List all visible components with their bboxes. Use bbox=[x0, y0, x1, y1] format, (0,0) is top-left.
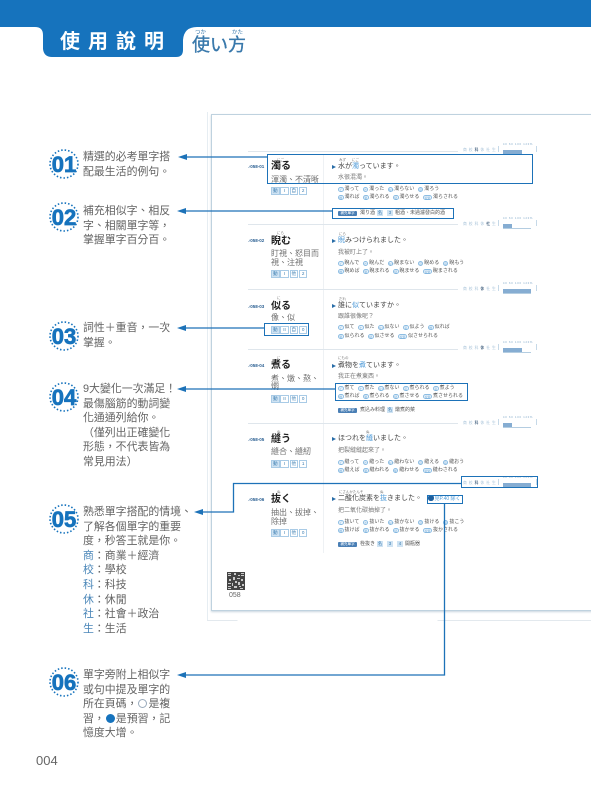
entry: 抜く: 二酸化炭素を抜きました。 bbox=[338, 495, 422, 502]
badge 06: 06 bbox=[52, 670, 76, 695]
entry: 睨む bbox=[248, 231, 464, 278]
entry: 煮る: 受 bbox=[364, 394, 367, 398]
entry: 睨む: 視、注視 bbox=[271, 258, 303, 267]
entry: 煮る: 煮れば 煮られる 煮させる 煮させられる bbox=[344, 393, 463, 399]
entry: 濁る: I bbox=[284, 188, 285, 193]
entry: 縫う: 受 bbox=[364, 468, 367, 472]
entry: 煮る: にもの bbox=[338, 356, 348, 360]
badge 03 bbox=[49, 321, 79, 351]
entry: 抜く: ♪058-06 bbox=[248, 497, 264, 502]
entry: 抜く: 除掉 bbox=[271, 517, 287, 526]
header band with tab bbox=[0, 0, 591, 57]
column divider bbox=[323, 154, 324, 553]
entry: 縫う bbox=[248, 430, 464, 473]
entry: 煮る: 0 bbox=[302, 396, 304, 401]
entry: 縫う: ぬ bbox=[277, 430, 280, 434]
entry: 睨む: 受 bbox=[364, 270, 367, 274]
badge 03: 03 bbox=[52, 324, 76, 349]
callout 01 highlight box bbox=[267, 154, 533, 184]
entry: 抜く: 把二氧化碳抽掉了。 bbox=[338, 508, 392, 514]
entry: 煮る: 使受 bbox=[425, 394, 430, 398]
entry: 似る: ない bbox=[379, 326, 385, 330]
entry: 濁る: 濁り酒 粗酒、未過濾發白的酒 bbox=[360, 210, 445, 216]
entry: 睨む: 意 bbox=[444, 262, 447, 266]
entry: 似る: 似る bbox=[271, 301, 291, 312]
entry: 抜く: 名 bbox=[378, 541, 382, 546]
entry: 抜く: I bbox=[284, 530, 285, 535]
entry: 縫う: 使 bbox=[394, 468, 397, 472]
arrow 01 bbox=[178, 154, 267, 160]
strip: row 2 frequency: 40 60 100 120% bbox=[503, 217, 533, 220]
strip: row 2 frequency bbox=[463, 217, 537, 229]
entry: 抜く: て bbox=[339, 520, 342, 524]
badge 05: 05 bbox=[52, 507, 76, 532]
panel: sample dictionary page bbox=[211, 114, 591, 611]
text 04: 最傷腦筋的動詞變 bbox=[83, 398, 170, 410]
entry: 縫う: ほつれを縫いました。 bbox=[338, 435, 408, 442]
text 04: 常見用法） bbox=[83, 456, 137, 468]
entry: 睨む: 睨んで 睨んだ 睨まない 睨める 睨もう bbox=[344, 260, 464, 266]
entry: 似る: 動 bbox=[273, 327, 278, 332]
text 05: 熟悉單字搭配的情境、 bbox=[83, 506, 192, 518]
cross reference: 見P.40 除く: 見P.40 除く bbox=[434, 496, 461, 502]
text 05: 社：社會＋政治 bbox=[83, 608, 159, 620]
text 04: 9大變化一次滿足！ bbox=[83, 383, 176, 395]
callout 03 highlight box bbox=[264, 323, 309, 336]
entry: 煮る: II bbox=[283, 396, 286, 401]
entry: 睨む: 我被盯上了。 bbox=[338, 250, 374, 256]
entry: 煮る: 他 bbox=[292, 396, 296, 401]
entry: 濁る: にご bbox=[277, 158, 284, 162]
entry: 煮る: た bbox=[359, 386, 362, 390]
strip: row 6 frequency: 40 60 100 120% bbox=[503, 476, 533, 479]
strip: row 5 frequency: 40 60 100 120% bbox=[503, 416, 533, 419]
text 05: 科：科技 bbox=[83, 579, 127, 591]
strip: row 1 frequency bbox=[463, 143, 537, 154]
entry: 縫う: 動 bbox=[273, 461, 278, 466]
text 05: 生：生活 bbox=[83, 623, 127, 635]
arrow 02 bbox=[177, 208, 332, 214]
entry: 縫う: 縫えば 縫われる 縫わせる 縫わされる bbox=[344, 467, 458, 473]
title: Japanese 使い方: 使い方 bbox=[192, 35, 246, 55]
text 04: 化通通列給你。 bbox=[83, 412, 159, 424]
text 02: 補充相似字、相反 bbox=[83, 205, 170, 217]
badge 02: 02 bbox=[52, 205, 76, 230]
entry: 縫う: 1 bbox=[302, 461, 304, 466]
entry: 似る: 條 bbox=[429, 326, 432, 330]
entry: 睨む: 2 bbox=[302, 271, 304, 276]
entry: 似る: ♪058-03 bbox=[248, 304, 264, 309]
text 05: 了解各個單字的重要 bbox=[83, 521, 181, 533]
text 01: 精選的必考單字搭 bbox=[83, 151, 170, 163]
panel edge: outer page line bbox=[207, 112, 208, 620]
arrow 03 bbox=[177, 325, 264, 331]
entry: 縫う: 縫合、縫紉 bbox=[271, 447, 311, 456]
entry: 濁る: 濁れば 濁られる 濁らせる 濁らされる bbox=[344, 194, 458, 200]
entry: 睨む: 睨めば 睨まれる 睨ませる 睨まされる bbox=[344, 268, 458, 274]
entry: 煮る bbox=[248, 356, 463, 413]
entry: 縫う: 縫って 縫った 縫わない 縫える 縫おう bbox=[344, 459, 464, 465]
text 01: 配最生活的例句。 bbox=[83, 166, 170, 178]
entry: 抜く: 他 bbox=[292, 530, 296, 535]
entry: 濁る: 濁って 濁った 濁らない 濁ろう bbox=[344, 186, 439, 192]
entry: 似る: 使受 bbox=[400, 334, 405, 338]
text 06: 單字旁附上相似字 bbox=[83, 669, 170, 681]
text 03 bbox=[83, 322, 170, 349]
entry: 抜く: 栓抜き 開瓶器 bbox=[360, 541, 420, 547]
entry: 縫う: ぬ bbox=[366, 430, 370, 434]
entry: 濁る: て bbox=[339, 188, 342, 192]
entry: 濁る: 補充單字 bbox=[340, 211, 355, 215]
text 04: （僅列出正確變化 bbox=[83, 427, 170, 439]
entry: 抜く: 抽出、拔掉、 bbox=[271, 508, 319, 517]
entry: 似る: 似られる 似させる 似させられる bbox=[344, 333, 438, 339]
title: Japanese 使い方: つか bbox=[195, 30, 206, 36]
QR code bbox=[227, 572, 245, 590]
badge 04 bbox=[49, 382, 79, 412]
entry: 煮る: 煮込み料理 燉煮的菜 bbox=[360, 407, 415, 413]
entry: 縫う: ない bbox=[389, 460, 394, 464]
strip: row 1 frequency: 商校科休社生 bbox=[463, 148, 498, 152]
text 06: 所在頁碼， 是複 bbox=[83, 698, 170, 710]
entry: 抜く: 補充單字 bbox=[340, 542, 355, 546]
strip: row 4 frequency bbox=[463, 341, 537, 353]
entry: 似る bbox=[248, 296, 450, 339]
entry: 抜く: 抜いて 抜いた 抜かない 抜ける 抜こう bbox=[344, 519, 464, 525]
title: 使用說明: 使用說明 bbox=[60, 31, 172, 53]
text 05: 商：商業＋經濟 bbox=[83, 550, 159, 562]
entry: 煮る: 補充單字 bbox=[340, 408, 355, 412]
entry: 縫う: ♪058-05 bbox=[248, 437, 264, 442]
badge 06 bbox=[49, 667, 79, 697]
entry: 縫う: 意 bbox=[444, 460, 447, 464]
entry: 煮る: て bbox=[339, 386, 342, 390]
arrow 06 bbox=[177, 504, 446, 678]
entry: 似る: 跟誰很像呢？ bbox=[338, 314, 374, 320]
panel edge: bottom page line bbox=[207, 620, 591, 621]
entry: 抜く: 可 bbox=[419, 520, 422, 524]
entry: 濁る: た bbox=[364, 188, 367, 192]
entry: 抜く: 使 bbox=[394, 528, 397, 532]
badge 01: 01 bbox=[52, 152, 76, 177]
QR label: 058 bbox=[229, 592, 241, 599]
text 06: 習， 是預習，記 bbox=[83, 713, 170, 725]
entry: 抜く: 0 bbox=[302, 530, 304, 535]
strip: row 3 frequency bbox=[463, 282, 537, 294]
entry: 睨む: 可 bbox=[419, 262, 422, 266]
strip: row 2 frequency: 商校科休社生 bbox=[463, 222, 498, 226]
entry: 抜く: にさんかたんそ bbox=[339, 490, 363, 494]
text 05: 休：休閒 bbox=[83, 594, 127, 606]
text 02: 掌握單字百分百。 bbox=[83, 234, 170, 246]
callout 06 highlight box bbox=[427, 495, 463, 504]
entry: 抜く: 抜く bbox=[271, 494, 291, 505]
entry: 似る: 0 bbox=[302, 327, 304, 332]
entry: 煮る: ♪058-04 bbox=[248, 363, 264, 368]
entry: 煮る: 我正在煮東西。 bbox=[338, 374, 380, 380]
entry: 濁る: 受 bbox=[364, 196, 367, 200]
entry: 濁る: にご bbox=[352, 158, 359, 162]
entry: 睨む: 他 bbox=[292, 271, 296, 276]
badge 01 bbox=[49, 149, 79, 179]
strip: row 5 frequency bbox=[463, 416, 537, 428]
entry: 睨む: 使受 bbox=[425, 270, 430, 274]
entry: 濁る: 條 bbox=[339, 196, 342, 200]
entry: 濁る: 自 bbox=[292, 188, 296, 193]
callout 02 highlight box bbox=[332, 208, 454, 219]
entry: 縫う: て bbox=[339, 460, 342, 464]
arrow 05 bbox=[194, 482, 461, 515]
entry: 抜く: ぬ bbox=[380, 490, 384, 494]
badge 02 bbox=[49, 202, 79, 232]
entry: 睨む: ♪058-02 bbox=[248, 238, 264, 243]
text 06: 或句中提及單字的 bbox=[83, 684, 170, 696]
entry: 抜く: 受 bbox=[364, 528, 367, 532]
entry: 睨む: にら bbox=[277, 231, 284, 235]
entry: 抜く: ぬ bbox=[277, 490, 280, 494]
text 06: 憶度大增。 bbox=[83, 727, 137, 739]
entry: 縫う: 縫う bbox=[271, 434, 291, 445]
entry: 似る: だれ bbox=[339, 297, 346, 301]
entry: 抜く: ない bbox=[389, 520, 394, 524]
text 02 bbox=[83, 204, 170, 246]
text 04: 形態，不代表皆為 bbox=[83, 441, 170, 453]
entry: 濁る bbox=[248, 158, 458, 216]
entry: 煮る: 動 bbox=[273, 396, 278, 401]
entry: 濁る: 意 bbox=[419, 188, 422, 192]
entry: 縫う: 可 bbox=[419, 460, 422, 464]
entry: 縫う: 條 bbox=[339, 468, 342, 472]
entry: 濁る: 水很混濁。 bbox=[338, 175, 368, 181]
entry: 濁る: 使 bbox=[394, 196, 397, 200]
entry: 縫う: た bbox=[364, 460, 367, 464]
entry: 煮る: 煮る bbox=[271, 360, 291, 371]
entry: 似る: た bbox=[359, 326, 362, 330]
entry: 似る: 受 bbox=[339, 334, 342, 338]
strip: row 5 frequency: 商校科休社生 bbox=[463, 420, 498, 424]
entry: 睨む: た bbox=[364, 262, 367, 266]
strip: row 3 frequency: 40 60 100 120% bbox=[503, 282, 533, 285]
entry: 似る: て bbox=[339, 326, 342, 330]
strip: row 4 frequency: 40 60 100 120% bbox=[503, 341, 533, 344]
entry: 煮る: 可 bbox=[404, 386, 407, 390]
entry: 似る: に bbox=[277, 296, 280, 300]
entry: 濁る: 水が濁っています。 bbox=[338, 163, 401, 170]
entry: 抜く: た bbox=[364, 520, 367, 524]
entry: 似る: 誰に似ていますか。 bbox=[338, 302, 401, 309]
entry: 煮る: 煮物を煮ています。 bbox=[338, 362, 401, 369]
entry: 煮る: 條 bbox=[339, 394, 342, 398]
text 05 bbox=[83, 506, 192, 635]
strip: row 3 frequency: 商校科休社生 bbox=[463, 286, 498, 290]
entry: 似る: 使 bbox=[369, 334, 372, 338]
entry: 煮る: 使 bbox=[394, 394, 397, 398]
callout 05 highlight box bbox=[461, 476, 538, 488]
text 01 bbox=[83, 150, 170, 178]
text 05: 度，秒答王就是你。 bbox=[83, 535, 181, 547]
entry: 睨む: 睨みつけられました。 bbox=[338, 237, 408, 244]
entry: 睨む: て bbox=[339, 262, 342, 266]
entry: 濁る: 名 bbox=[378, 210, 382, 215]
entry: 睨む: 睨む bbox=[271, 236, 291, 247]
text 02: 字、相關單字等， bbox=[83, 220, 170, 232]
entry: 抜く bbox=[248, 490, 464, 547]
text 03: 詞性＋重音，一次 bbox=[83, 322, 170, 334]
entry: 縫う: 使受 bbox=[424, 468, 430, 472]
strip: row 1 frequency: 40 60 100 120% bbox=[503, 143, 533, 146]
badge 05 bbox=[49, 504, 79, 534]
entry: 睨む: 動 bbox=[273, 271, 278, 276]
strip: row 4 frequency: 商校科休社生 bbox=[463, 346, 498, 350]
badge 04: 04 bbox=[52, 385, 77, 410]
entry: 濁る: 使受 bbox=[425, 196, 430, 200]
entry: 抜く: 3 bbox=[389, 541, 391, 546]
entry: 似る: II bbox=[283, 327, 286, 332]
entry: 濁る: 渾濁、不清晰 bbox=[271, 175, 319, 184]
text 03: 掌握。 bbox=[83, 337, 116, 349]
row separators bbox=[248, 151, 458, 488]
text 06 bbox=[83, 668, 170, 739]
entry: 濁る: 動 bbox=[273, 188, 278, 193]
entry: 濁る: 濁る bbox=[271, 161, 291, 172]
entry: 睨む: にら bbox=[339, 232, 346, 236]
title: Japanese 使い方: かた bbox=[232, 30, 243, 36]
entry: 似る: 似て 似た 似ない 似よう 似れば bbox=[344, 324, 450, 330]
arrow 04 bbox=[177, 386, 335, 392]
text 04 bbox=[83, 382, 176, 468]
entry: 睨む: 盯視、怒目而 bbox=[271, 249, 319, 258]
entry: 似る: 意 bbox=[404, 326, 407, 330]
entry: 抜く: 條 bbox=[339, 528, 342, 532]
strip: row 6 frequency: 商校科休社生 bbox=[463, 480, 498, 484]
entry: 煮る: 燜 bbox=[271, 382, 279, 391]
entry: 煮る: 意 bbox=[434, 386, 437, 390]
entry: 煮る: に bbox=[277, 356, 280, 360]
entry: 睨む: ない bbox=[389, 262, 394, 266]
entry: 濁る: 2 bbox=[302, 188, 304, 193]
entry: 抜く: 4 bbox=[399, 541, 401, 546]
page number: 004 bbox=[36, 753, 58, 768]
entry: 濁る: ない bbox=[389, 188, 394, 192]
callout 04 highlight box bbox=[335, 383, 468, 401]
entry: 似る: 像、似 bbox=[271, 313, 295, 322]
entry: 濁る: ♪058-01 bbox=[248, 164, 264, 169]
strip: row 6 frequency bbox=[463, 476, 537, 487]
entry: 抜く: 抜けば 抜かれる 抜かせる 抜かされる bbox=[344, 527, 458, 533]
entry: 濁る: 3 bbox=[389, 210, 391, 215]
entry: 抜く: 意 bbox=[444, 520, 447, 524]
entry: 睨む: 使 bbox=[394, 270, 397, 274]
entry: 睨む: I bbox=[284, 271, 285, 276]
entry: 似る: 自 bbox=[292, 327, 296, 332]
entry: 睨む: 條 bbox=[339, 270, 342, 274]
entry: 煮る: ない bbox=[379, 386, 385, 390]
entry: 縫う: 他 bbox=[292, 461, 296, 466]
entry: 縫う: 把裂縫縫起來了。 bbox=[338, 448, 386, 454]
entry: 縫う: I bbox=[284, 461, 285, 466]
entry: 濁る: みず bbox=[339, 158, 346, 162]
entry: 煮る: 煮て 煮た 煮ない 煮られる 煮よう bbox=[344, 385, 455, 391]
entry: 抜く: 使受 bbox=[425, 528, 430, 532]
entry: 抜く: 動 bbox=[273, 530, 278, 535]
text 05: 校：學校 bbox=[83, 564, 127, 576]
entry: 煮る: 名 bbox=[388, 407, 392, 412]
entry: 煮る: 煮、燉、熬、 bbox=[271, 374, 319, 383]
